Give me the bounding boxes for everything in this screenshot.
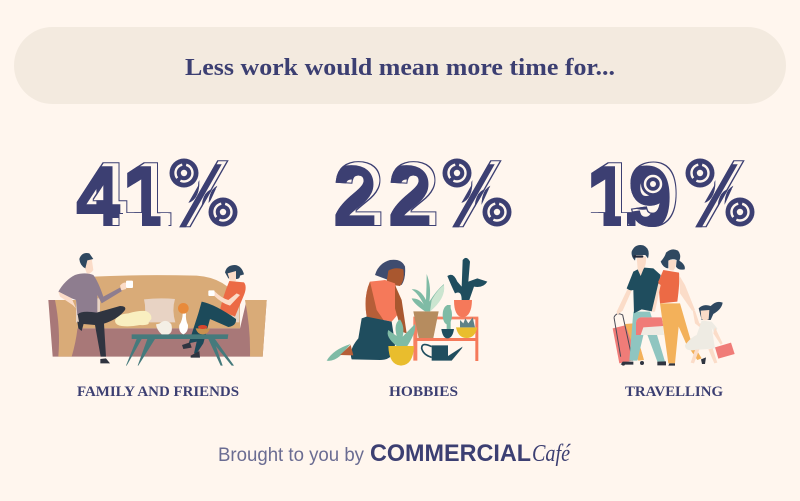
- woman: [182, 265, 246, 358]
- label: hobbies: HOBBIES: [389, 384, 458, 400]
- statistic: 19%: 19: [588, 148, 677, 242]
- title banner: [14, 27, 786, 104]
- illustration: woman gardening with potted plants: [327, 258, 487, 366]
- potted plants on shelf: [388, 258, 487, 366]
- statistic: 41%: %: [168, 142, 240, 246]
- suitcase: [613, 314, 644, 366]
- statistic: 22%: 22: [335, 148, 437, 242]
- label: travelling: TRAVELLING: [625, 384, 723, 400]
- logo: CommercialCafé: Café: [532, 441, 571, 467]
- woman: [327, 260, 407, 361]
- title: Less work would mean more time for...: [185, 54, 615, 81]
- footer credit: [218, 440, 571, 467]
- coffee table: [126, 303, 234, 366]
- statistic: 19%: [590, 158, 754, 228]
- statistic: 22%: [335, 158, 512, 228]
- statistic: 19%: %: [684, 142, 756, 246]
- statistic: 22%: %: [441, 142, 513, 246]
- label: family and friends: FAMILY AND FRIENDS: [77, 384, 239, 400]
- illustration: family travelling with luggage: [613, 245, 735, 366]
- man: [58, 253, 133, 363]
- footer credit: Brought to you by: [218, 444, 364, 466]
- handbag: [636, 317, 664, 335]
- father: [617, 245, 666, 365]
- illustration: couple with tea on a sofa: [48, 253, 267, 366]
- statistic: 41%: [76, 158, 238, 228]
- logo: CommercialCafé: COMMERCIAL: [370, 440, 531, 467]
- statistic: 41%: 41: [78, 148, 171, 242]
- daughter: [685, 302, 735, 364]
- mother: [652, 249, 702, 366]
